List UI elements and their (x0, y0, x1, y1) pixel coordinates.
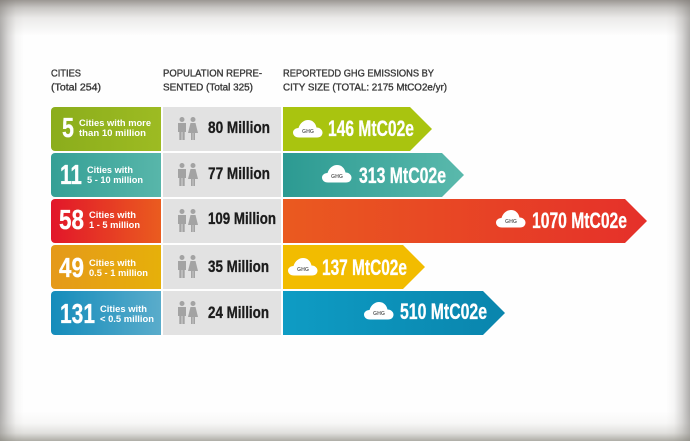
panel: population 77 million: 77 Million (208, 165, 270, 183)
arrow: 146 MtC02e: 146 MtC02e (328, 116, 414, 141)
row: cities 5-10 million (51, 153, 464, 197)
icon: GHG cloud (293, 120, 322, 138)
panel: 58 cities: Cities with (89, 210, 136, 220)
panel: population 24 million (163, 291, 281, 335)
heading: cities: (Total 254) (51, 82, 101, 94)
panel: 11 cities: 11 (60, 159, 82, 190)
row: cities under 0.5 million (51, 291, 505, 335)
arrow: 510 MtC02e: 510 MtC02e (400, 299, 487, 324)
panel: 131 cities: Cities with (100, 304, 147, 314)
icon: GHG cloud: GHG (297, 267, 309, 273)
icon: people (178, 209, 198, 232)
panel: 11 cities: Cities with (87, 165, 133, 175)
icon: GHG cloud (364, 302, 394, 320)
panel: 58 cities (51, 199, 161, 243)
panel: 49 cities (51, 245, 161, 289)
panel: population 109 million (163, 199, 281, 243)
icon: GHG cloud (288, 258, 318, 276)
heading: reported GHG emissions (283, 68, 447, 94)
panel: 58 cities: 1 - 5 million (89, 220, 140, 230)
panel: population 80 million: 80 Million (208, 119, 270, 137)
heading: reported GHG emissions: CITY SIZE (TOTAL: 2175 MtCO2e/yr) (283, 82, 447, 94)
arrow: 1070 MtC02e: 1070 MtC02e (532, 208, 627, 233)
panel: 131 cities: < 0.5 million (100, 314, 154, 324)
row: cities 1-5 million (51, 199, 647, 243)
panel: population 80 million (163, 107, 281, 151)
panel: 58 cities: 58 (59, 204, 84, 235)
heading: cities: CITIES (51, 68, 81, 80)
arrow: 313 MtC02e (283, 153, 464, 197)
heading: population represented: SENTED (Total 325) (163, 82, 253, 94)
icon: GHG cloud: GHG (302, 129, 314, 135)
panel: 5 cities: 5 (62, 112, 74, 143)
panel: 11 cities (51, 153, 161, 197)
panel: population 35 million: 35 Million (208, 258, 269, 276)
panel: 5 cities: Cities with more (79, 118, 151, 128)
row: cities over 10 million (51, 107, 432, 151)
panel: 49 cities: Cities with (89, 258, 136, 268)
panel: population 77 million (163, 153, 281, 197)
arrow: 313 MtC02e: 313 MtC02e (359, 163, 446, 188)
icon: GHG cloud: GHG (505, 219, 517, 225)
panel: population 24 million: 24 Million (208, 304, 269, 322)
icon: GHG cloud: GHG (373, 311, 385, 317)
icon: GHG cloud (322, 165, 352, 182)
icon: people (178, 117, 198, 140)
panel: 131 cities (51, 291, 161, 335)
heading: cities (51, 68, 101, 94)
arrow: 1070 MtC02e (283, 199, 647, 243)
icon: people (178, 301, 198, 324)
arrow: 510 MtC02e (283, 291, 505, 335)
row: cities 0.5-1 million (51, 245, 425, 289)
arrow: 137 MtC02e: 137 MtC02e (322, 255, 407, 280)
heading: population represented: POPULATION REPRE- (163, 68, 262, 80)
icon: people (178, 163, 198, 186)
panel: population 35 million (163, 245, 281, 289)
icon: GHG cloud (496, 210, 526, 228)
panel: 5 cities: than 10 million (79, 128, 146, 138)
arrow: 146 MtC02e (283, 107, 432, 151)
icon: people (178, 255, 198, 278)
panel: population 109 million: 109 Million (208, 210, 276, 228)
heading: reported GHG emissions: REPORTEDD GHG EMISSIONS BY (283, 68, 434, 80)
panel: 11 cities: 5 - 10 million (87, 175, 143, 185)
panel: 131 cities: 131 (60, 298, 95, 329)
icon: GHG cloud: GHG (331, 174, 343, 180)
panel: 5 cities (51, 107, 161, 151)
panel: 49 cities: 49 (59, 252, 84, 283)
arrow: 137 MtC02e (283, 245, 425, 289)
panel: 49 cities: 0.5 - 1 million (89, 268, 148, 278)
heading: population represented (163, 68, 262, 94)
